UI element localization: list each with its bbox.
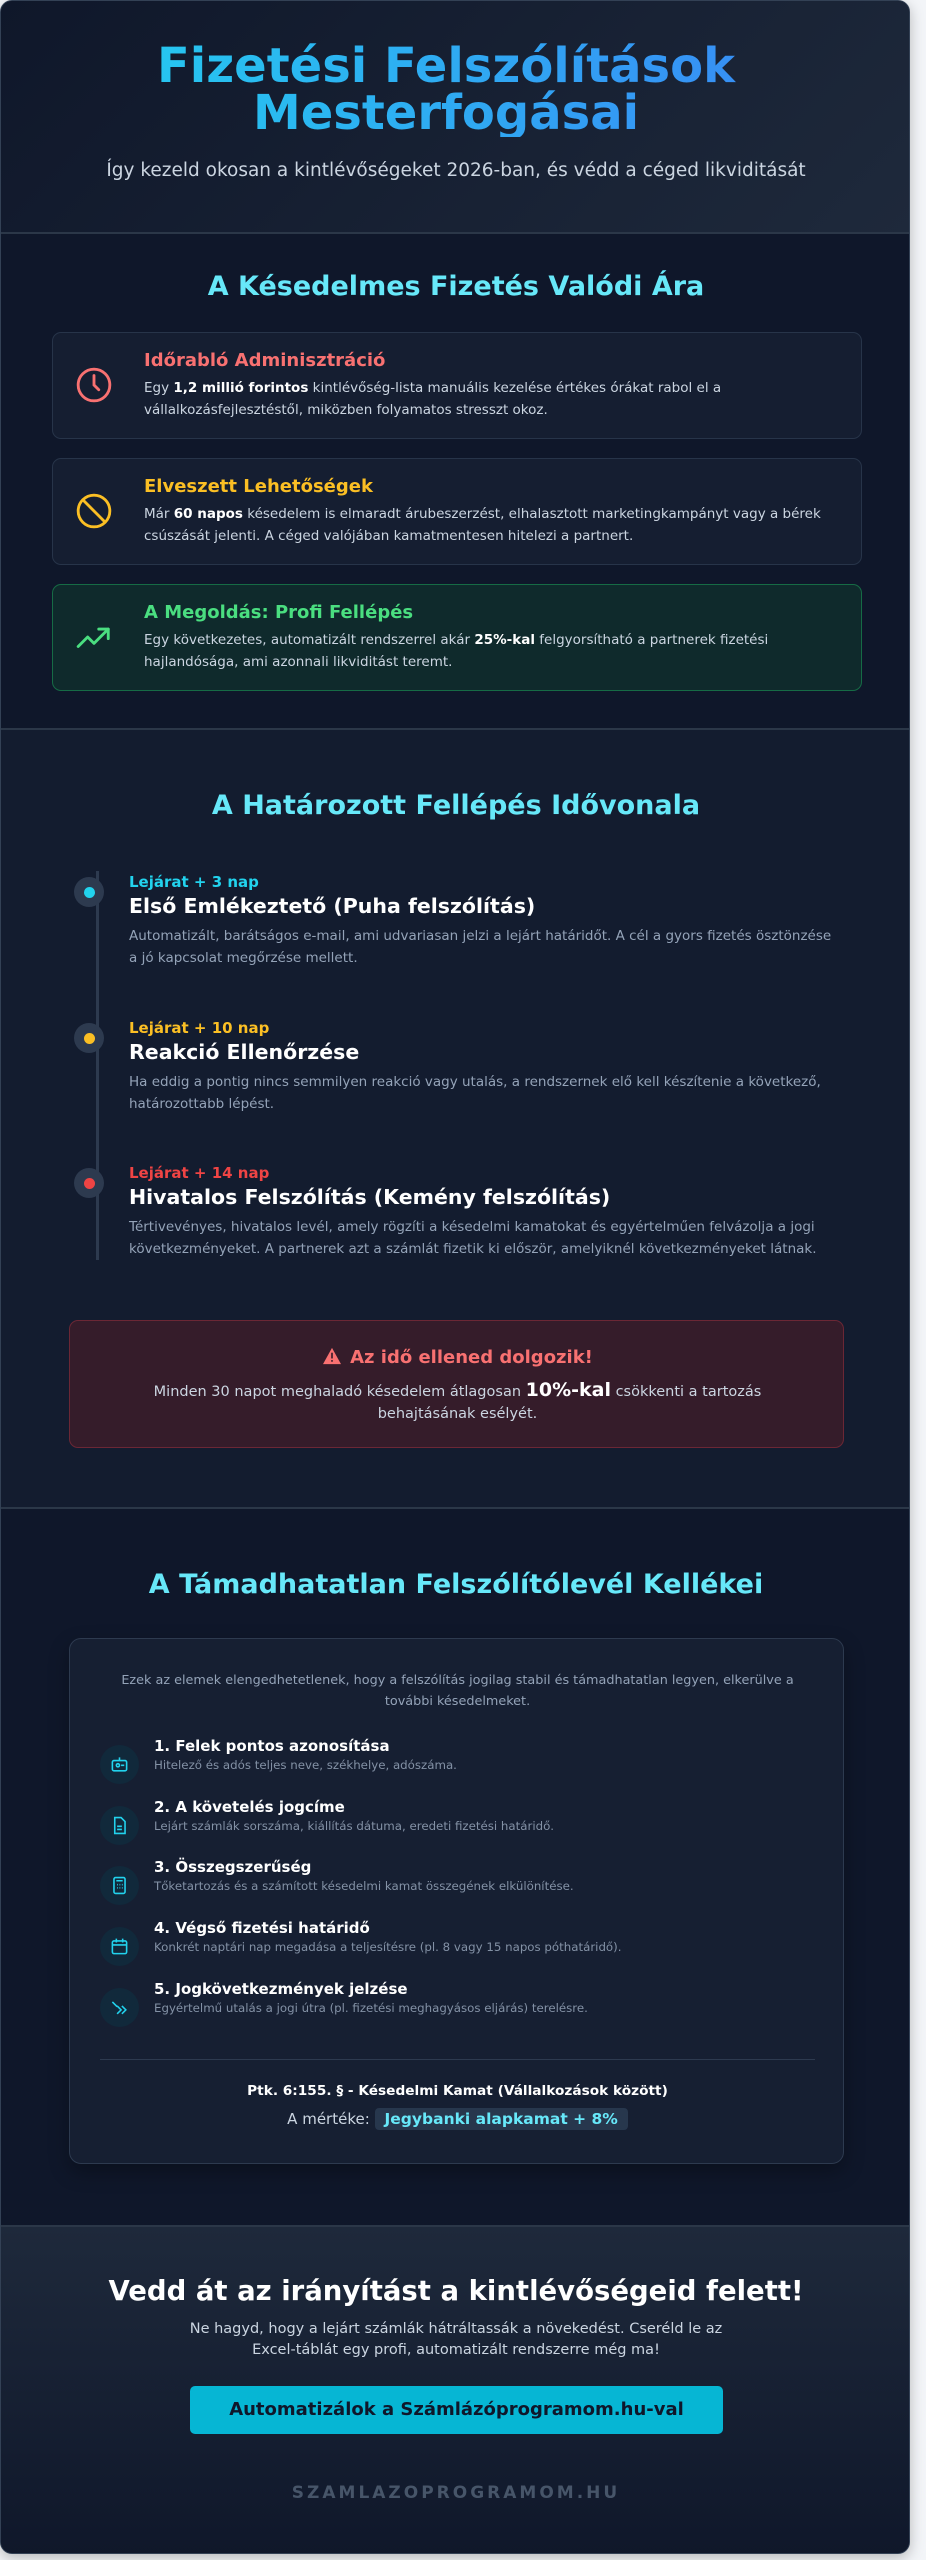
card: lost opportunities: Már 60 napos késedelem is elmaradt árubeszerzést, elhalasztott marketingkampányt vagy a bérek csúszását jelenti. A céged valójában kamatmentesen hitelezi a partnert. xyxy=(144,506,821,544)
callout: time works against you xyxy=(69,1320,844,1448)
card: solution: Egy következetes, automatizált rendszerrel akár 25%-kal felgyorsítható a partnerek fizetési hajlandósága, ami azonnali likviditást teremt. xyxy=(144,632,768,670)
subtitle: Így kezeld okosan a kintlévőségeket 2026-ban, és védd a céged likviditását xyxy=(106,160,806,181)
rate badge xyxy=(287,2108,628,2130)
heading: A Határozott Fellépés Idővonala xyxy=(212,790,700,821)
step 2 xyxy=(74,1019,821,1112)
title: Mesterfogásai xyxy=(253,85,639,141)
item 4: 4. Végső fizetési határidő xyxy=(154,1919,370,1937)
heading: A Támadhatatlan Felszólítólevél Kellékei xyxy=(149,1569,763,1600)
rate badge: A mértéke: xyxy=(287,2110,370,2128)
footer brand: SZAMLAZOPROGRAMOM.HU xyxy=(292,2483,620,2503)
header xyxy=(1,1,911,234)
item 2: 2. A követelés jogcíme xyxy=(154,1798,345,1816)
callout: time works against you: Az idő ellened dolgozik! xyxy=(350,1347,593,1368)
icon: ban xyxy=(76,494,112,528)
icon: clock xyxy=(76,368,112,402)
title xyxy=(1,43,891,137)
timeline line xyxy=(96,871,99,1260)
card: solution: A Megoldás: Profi Fellépés xyxy=(144,602,413,623)
icon: trending up xyxy=(76,628,110,648)
heading: A Késedelmes Fizetés Valódi Ára xyxy=(208,271,704,302)
section: call to action xyxy=(1,2225,911,2557)
step 3 xyxy=(74,1164,817,1256)
step 3: Tértivevényes, hivatalos levél, amely rögzíti a késedelmi kamatokat és egyértelműen felvázolja a jogi következményeket. A partnerek azt a számlát fizetik ki először, amelyiknél következményeket látnak. xyxy=(129,1219,817,1256)
item 2 xyxy=(100,1798,554,1844)
item 5: 5. Jogkövetkezmények jelzése xyxy=(154,1980,408,1998)
step 2: Lejárat + 10 nap xyxy=(129,1019,269,1037)
button: Automatizálok a Számlázóprogramom.hu-val xyxy=(229,2399,684,2420)
title: Fizetési Felszólítások xyxy=(157,38,735,94)
CTA heading: Vedd át az irányítást a kintlévőségeid felett! xyxy=(108,2275,804,2307)
item 4: Konkrét naptári nap megadása a teljesítésre (pl. 8 vagy 15 napos póthatáridő). xyxy=(154,1940,622,1954)
card: lost opportunities: Elveszett Lehetőségek xyxy=(144,476,373,497)
panel: checklist xyxy=(69,1638,844,2164)
section: requirements xyxy=(1,1509,911,2225)
CTA text: Ne hagyd, hogy a lejárt számlák hátráltassák a növekedést. Cseréld le az Excel-táblát egy profi, automatizált rendszerre még ma! xyxy=(190,2321,722,2358)
card: time-consuming admin xyxy=(52,332,862,439)
item 3: 3. Összegszerűség xyxy=(154,1858,311,1876)
legal note: Ptk. 6:155. § - Késedelmi Kamat (Vállalkozások között) xyxy=(247,2083,668,2099)
intro: Ezek az elemek elengedhetetlenek, hogy a felszólítás jogilag stabil és támadhatatlan legyen, elkerülve a további késedelmeket. xyxy=(121,1673,794,1709)
step 1: Lejárat + 3 nap xyxy=(129,873,259,891)
item 1: Hitelező és adós teljes neve, székhelye, adószáma. xyxy=(154,1758,457,1772)
card: solution xyxy=(52,584,862,691)
item 2: Lejárt számlák sorszáma, kiállítás dátuma, eredeti fizetési határidő. xyxy=(154,1819,554,1833)
step 3: Lejárat + 14 nap xyxy=(129,1164,269,1182)
step 1: Első Emlékeztető (Puha felszólítás) xyxy=(129,894,535,918)
section: timeline xyxy=(1,728,911,1509)
item 5 xyxy=(100,1980,588,2026)
card: time-consuming admin: Időrabló Adminisztráció xyxy=(144,350,385,371)
step 3: Hivatalos Felszólítás (Kemény felszólítás) xyxy=(129,1185,610,1209)
item 1 xyxy=(100,1737,457,1784)
step 1: Automatizált, barátságos e-mail, ami udvariasan jelzi a lejárt határidőt. A cél a gyors fizetés ösztönzése a jó kapcsolat megőrzése mellett. xyxy=(129,928,831,966)
item 4 xyxy=(100,1919,622,1966)
item 3: Tőketartozás és a számított késedelmi kamat összegének elkülönítése. xyxy=(154,1879,574,1893)
section: cost of late payment xyxy=(1,234,911,728)
step 1 xyxy=(74,873,831,966)
item 3 xyxy=(100,1858,574,1904)
rate badge: Jegybanki alapkamat + 8% xyxy=(385,2110,618,2128)
item 5: Egyértelmű utalás a jogi útra (pl. fizetési meghagyásos eljárás) terelésre. xyxy=(154,2001,588,2015)
card: time-consuming admin: Egy 1,2 millió forintos kintlévőség-lista manuális kezelése értékes órákat rabol el a vállalkozásfejlesztéstől, miközben folyamatos stresszt okoz. xyxy=(144,380,721,418)
step 2: Reakció Ellenőrzése xyxy=(129,1040,359,1064)
step 2: Ha eddig a pontig nincs semmilyen reakció vagy utalás, a rendszernek elő kell készítenie a következő, határozottabb lépést. xyxy=(129,1074,821,1112)
card: lost opportunities xyxy=(52,458,862,565)
item 1: 1. Felek pontos azonosítása xyxy=(154,1737,390,1755)
callout: time works against you: Minden 30 napot meghaladó késedelem átlagosan 10%-kal csökkenti a tartozás behajtásának esélyét. xyxy=(154,1379,761,1422)
button xyxy=(190,2386,723,2434)
